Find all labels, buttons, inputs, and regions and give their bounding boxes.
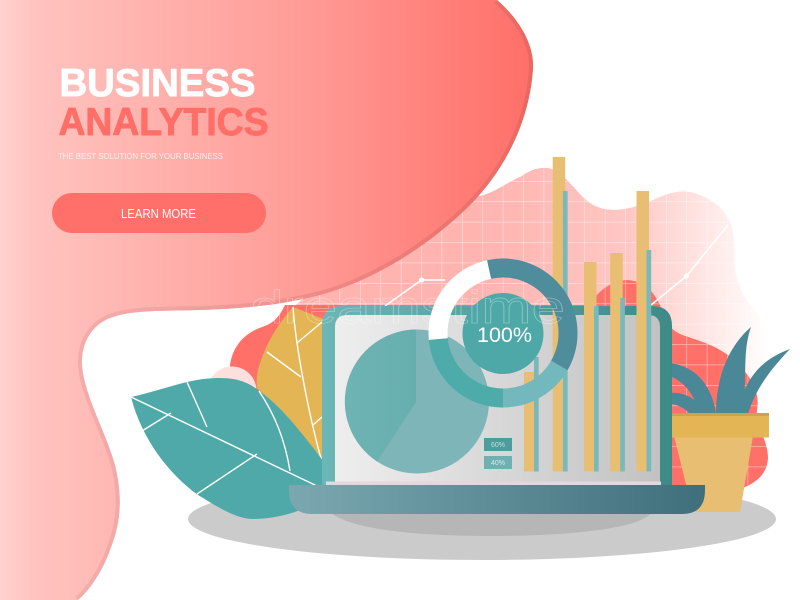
title: ANALYTICS	[58, 101, 268, 144]
legend tags: 40%	[491, 460, 505, 467]
background pink grid blob	[290, 168, 790, 480]
pie chart	[345, 330, 489, 474]
laptop base	[289, 485, 705, 514]
donut centre value	[462, 293, 544, 374]
icon: yellow leaf	[257, 307, 326, 470]
watermark: dreamstime	[250, 281, 565, 333]
laptop bezel	[322, 306, 672, 486]
subtitle: THE BEST SOLUTION FOR YOUR BUSINESS	[58, 152, 223, 161]
line chart on grid	[385, 225, 728, 306]
icon: teal leaf	[131, 378, 330, 519]
laptop hinge strip	[326, 482, 661, 486]
learn more button	[52, 193, 266, 233]
legend tags: 60%	[491, 442, 505, 449]
donut chart	[438, 268, 568, 398]
icon: pale circle behind leaves	[208, 366, 256, 416]
ground shadow	[188, 478, 776, 560]
legend tags	[484, 438, 512, 469]
laptop screen	[335, 315, 660, 485]
bar chart	[524, 157, 651, 472]
red blob behind plant and leaves	[230, 280, 768, 490]
title	[58, 62, 268, 144]
icon: potted plant	[668, 327, 790, 512]
main coral wave panel	[0, 0, 533, 600]
laptop	[289, 306, 705, 514]
title: BUSINESS	[60, 62, 256, 105]
donut centre value: 100%	[477, 324, 532, 347]
learn more button: LEARN MORE	[121, 207, 196, 221]
